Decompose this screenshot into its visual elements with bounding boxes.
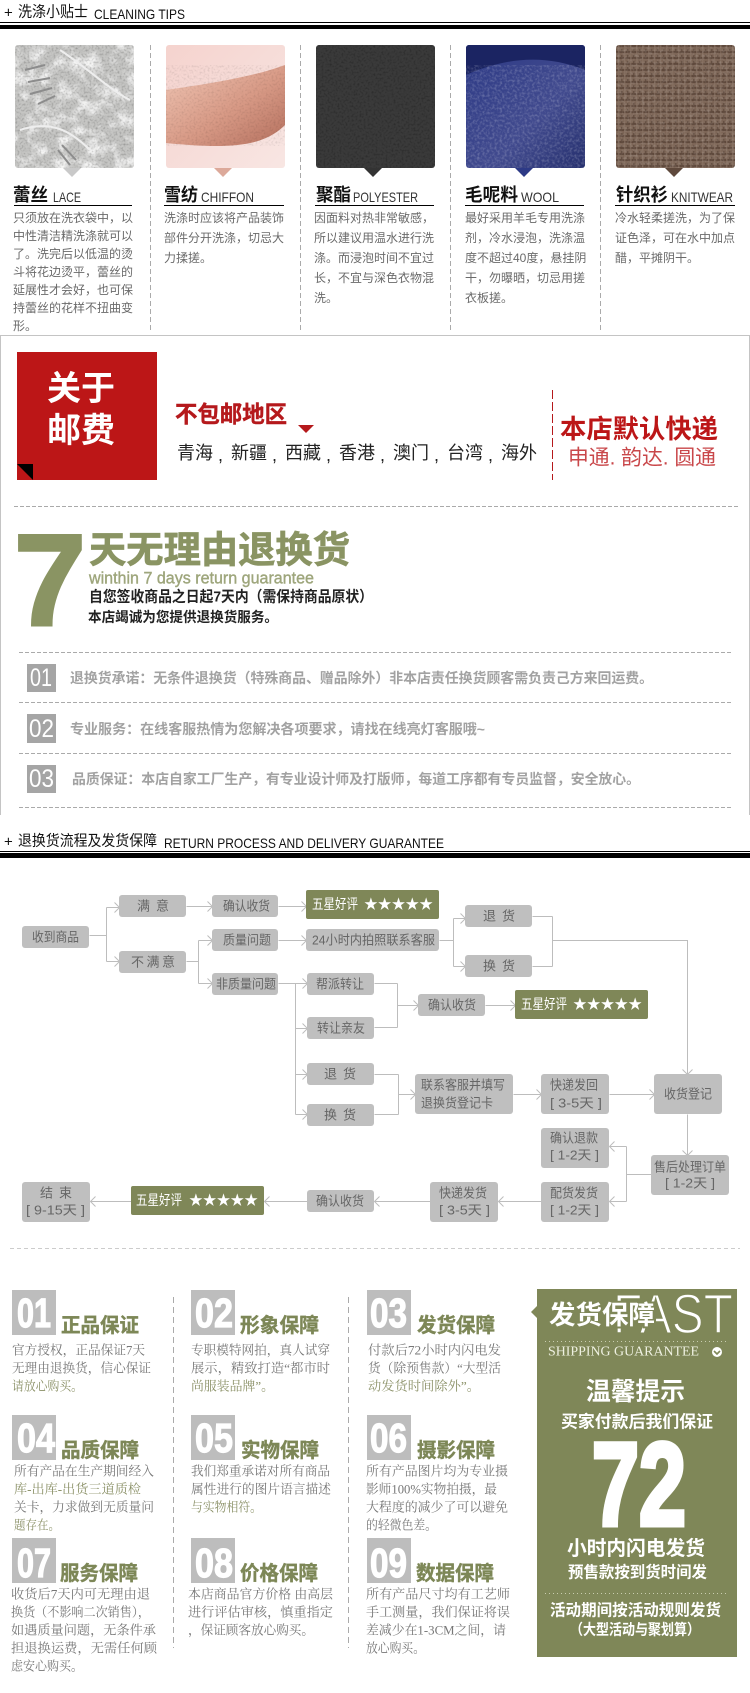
heading: 7 day return: 本店竭诚为您提供退换货服务。 [88, 609, 278, 625]
step: exchange 2 [307, 1104, 374, 1126]
guarantee 02: 专职模特网拍，真人试穿 [191, 1342, 330, 1358]
guarantee 04: 所有产品在生产期间经入 [14, 1464, 154, 1478]
row 01: return promise: 退换货承诺：无条件退换货（特殊商品、赠品除外）非本店责任换货顾客需负责己方来回运费。 [70, 670, 653, 686]
icon: down chevron [712, 1347, 722, 1357]
guarantee 05: 与实物相符。 [191, 1500, 262, 1514]
guarantee 07 [11, 1538, 158, 1674]
badge: about shipping: 关于 [47, 370, 115, 408]
text: polyester care: 因面料对热非常敏感， [314, 210, 434, 225]
step: confirm refund: 确认退款 [550, 1130, 598, 1146]
step: five star review 2: ★★★★★ [573, 996, 642, 1012]
step: confirm receipt 2: 确认收货 [428, 998, 476, 1012]
step: pick and ship [541, 1182, 609, 1222]
heading: shipping guarantee: 发货保障 [549, 1300, 655, 1330]
guarantee 02: 展示，精致打造“都市时 [191, 1360, 330, 1376]
guarantee 01: 正品保证 [61, 1314, 139, 1337]
step: five star review 2 [515, 990, 648, 1019]
step: contact service and fill card [415, 1074, 513, 1114]
step: exchange: 换 货 [483, 958, 515, 974]
step: confirm receipt 2 [418, 994, 485, 1016]
text: lace care: 只须放在洗衣袋中，以 [13, 210, 133, 225]
guarantee 03: 03 [370, 1290, 407, 1336]
guarantee 03: 动发货时间除外”。 [368, 1378, 480, 1394]
icon: red down triangle [298, 425, 314, 433]
guarantee 07: 虑安心购买。 [11, 1658, 83, 1674]
icon: left notch [531, 1306, 537, 1318]
heading: wool: 毛呢料 [465, 185, 518, 205]
text: lace care: 中性清洁精洗涤就可以 [13, 228, 133, 243]
heading: lace [13, 185, 81, 205]
guarantee 03: 货（除预售款）“大型活 [368, 1360, 501, 1376]
section header: return process [0, 832, 750, 858]
guarantee 08: ，保证顾客放心购买。 [188, 1622, 314, 1638]
step: ship back: [ 3-5天 ] [550, 1096, 602, 1110]
heading: regions without free shipping: 不包邮地区 [175, 401, 287, 427]
badge: about shipping [17, 352, 157, 480]
section header: cleaning tips: + [4, 4, 13, 22]
panel: wool [465, 45, 586, 305]
text: lace care [13, 210, 133, 333]
guarantee 04: 库-出库-出货三道质检 [14, 1482, 141, 1496]
text: excluded regions: 澳门 [393, 443, 429, 463]
step: five star review 3: ★★★★★ [189, 1192, 258, 1208]
step: goods registered [654, 1074, 722, 1114]
step: end: [ 9-15天 ] [26, 1202, 85, 1218]
step: quality issue [212, 929, 278, 951]
watermark: FAST: FAST [613, 1282, 733, 1345]
panel: chiffon [164, 45, 285, 265]
step: received goods: 收到商品 [32, 930, 79, 944]
text: excluded regions: , [380, 445, 385, 465]
step: ship back [541, 1074, 609, 1114]
step: contact service and fill card: 联系客服并填写 [421, 1078, 505, 1092]
callout text: 温馨提示 [586, 1378, 685, 1406]
step: five star review 2: 五星好评 [521, 996, 567, 1012]
step: quality issue: 质量问题 [223, 932, 271, 948]
row 01: return promise [27, 664, 653, 692]
row 03: quality [27, 765, 640, 793]
step: satisfied: 满 意 [137, 898, 169, 914]
step: return 2 [307, 1063, 374, 1085]
panel: shipping and returns frame [0, 336, 750, 815]
text: lace care: 延展性才会好，也可保 [13, 283, 133, 297]
step: ship back: 快递发回 [550, 1078, 598, 1092]
text: lace care: 了。洗完后以低温的烫 [13, 246, 133, 261]
guarantee 01 [12, 1290, 151, 1394]
guarantee 07: 服务保障 [60, 1562, 138, 1585]
heading: chiffon: 雪纺 [164, 184, 198, 205]
section header: cleaning tips: CLEANING TIPS [94, 6, 185, 22]
section header: cleaning tips: 洗涤小贴士 [18, 4, 88, 20]
text: lace care: 形。 [13, 319, 37, 333]
text: chiffon care: 洗涤时应该将产品装饰 [164, 210, 284, 225]
text: wool care: 干，勿曝晒，切忌用搓 [465, 270, 585, 285]
text: chiffon care [164, 210, 284, 265]
section header: return process: + [4, 834, 13, 850]
row 01: return promise: 01 [30, 664, 52, 692]
panel: shipping guarantee: 小时内闪电发货 [567, 1536, 705, 1560]
step: exchange [465, 955, 532, 977]
swatch: lace fabric [15, 45, 134, 168]
step: pick and ship: [ 1-2天 ] [550, 1202, 599, 1218]
guarantee 04: 关卡，力求做到无质量问 [14, 1500, 154, 1516]
guarantee 09: 放心购买。 [366, 1640, 425, 1656]
heading: knitwear [616, 185, 733, 205]
guarantee 08: 价格保障 [240, 1562, 318, 1585]
text: wool care: 衣板搓。 [465, 290, 513, 305]
heading: knitwear: 针织衫 [616, 185, 668, 205]
text: excluded regions: 台湾 [447, 443, 483, 463]
step: end: 结 束 [40, 1186, 72, 1200]
guarantee 05 [191, 1415, 331, 1514]
step: transfer to friends [307, 1017, 374, 1039]
guarantee 07: 收货后7天内可无理由退 [11, 1586, 150, 1602]
step: confirm receipt: 确认收货 [223, 898, 270, 914]
pointer [214, 168, 232, 177]
panel: shipping guarantee: （大型活动与聚划算） [570, 1620, 700, 1638]
guarantee 06: 大程度的减少了可以避免 [366, 1500, 508, 1514]
step: confirm refund: [ 1-2天 ] [550, 1148, 599, 1162]
step: five star review 3: 五星好评 [136, 1192, 182, 1208]
guarantee 03: 付款后72小时内闪电发 [368, 1342, 501, 1358]
heading: 7 day return [14, 507, 373, 653]
text: polyester care: 洗。 [314, 291, 338, 305]
step: after-sale processing [651, 1155, 729, 1195]
guarantee 01: 无理由退换货，信心保证 [12, 1360, 151, 1376]
guarantee 02: 尚服装品牌”。 [191, 1378, 274, 1394]
text: knitwear care: 证色泽，可在水中加点 [615, 230, 735, 245]
guarantee 08 [188, 1538, 333, 1638]
heading: chiffon: CHIFFON [201, 189, 254, 205]
heading: polyester: 聚酯 [316, 185, 351, 205]
step: confirm receipt 3 [307, 1190, 374, 1212]
heading: 7 day return: 天无理由退换货 [89, 530, 350, 570]
text: default couriers [560, 414, 718, 470]
swatch: wool fabric [466, 45, 585, 168]
guarantee 02 [191, 1290, 330, 1394]
guarantee 02: 形象保障 [240, 1313, 319, 1337]
step: transfer to friends: 转让亲友 [317, 1020, 365, 1036]
step: confirm refund [541, 1128, 609, 1168]
guarantee 09: 差减少在1-3CM之间，请 [366, 1622, 506, 1638]
step: five star review: ★★★★★ [364, 896, 433, 912]
guarantee 04: 品质保障 [61, 1439, 139, 1462]
red dashed divider [552, 390, 554, 480]
step: transfer via group [307, 973, 374, 995]
dashed column dividers [150, 45, 600, 331]
step: return 2: 退 货 [324, 1066, 356, 1082]
text: default couriers: 本店默认快递 [560, 414, 718, 444]
text: excluded regions: , [326, 445, 331, 465]
guarantee 05: 我们郑重承诺对所有商品 [191, 1464, 330, 1478]
step: five star review: 五星好评 [312, 896, 358, 912]
step: courier ship [430, 1182, 498, 1222]
step: transfer via group: 帮派转让 [316, 976, 364, 992]
guarantee 03: 发货保障 [417, 1313, 495, 1337]
step: contact service and fill card: 退换货登记卡 [421, 1096, 493, 1110]
text: default couriers: 申通. 韵达. 圆通 [568, 446, 716, 470]
text: excluded regions: , [488, 445, 493, 465]
guarantee 06: 的轻微色差。 [366, 1518, 437, 1532]
connector arrows [90, 902, 692, 1206]
step: after-sale processing: 售后处理订单 [654, 1160, 726, 1174]
step: satisfied [119, 895, 186, 917]
section header: cleaning tips [0, 4, 750, 29]
heading: lace: 蕾丝 [13, 185, 48, 205]
panel: knitwear [615, 45, 735, 265]
panel: shipping guarantee: 预售款按到货时间发 [568, 1562, 707, 1582]
step: five star review [306, 890, 439, 919]
pointer [364, 168, 382, 177]
guarantee 07: 如遇质量问题，无条件承 [11, 1622, 156, 1638]
text: excluded regions: , [218, 445, 223, 465]
text: excluded regions: 香港 [339, 443, 375, 463]
heading: chiffon [164, 184, 254, 205]
row 02: service: 02 [29, 715, 54, 743]
guarantee 03 [367, 1290, 501, 1394]
guarantee 04: 04 [17, 1415, 55, 1461]
guarantee 08: 进行评估审核，慎重指定 [188, 1604, 333, 1620]
guarantee 01: 01 [17, 1290, 51, 1336]
step: non quality issue [212, 973, 278, 995]
panel: lace [13, 45, 134, 333]
guarantee 06: 06 [370, 1415, 407, 1461]
text: knitwear care: 醋，平摊阴干。 [615, 250, 699, 265]
pointer [665, 168, 683, 177]
row 02: service [27, 714, 485, 743]
guarantee 02: 02 [195, 1290, 233, 1336]
step: non quality issue: 非质量问题 [216, 976, 276, 992]
panel: shipping guarantee [531, 1282, 737, 1657]
heading: 7 day return: 7 [14, 507, 86, 653]
text: excluded regions: , [272, 445, 277, 465]
heading: lace: LACE [53, 189, 81, 205]
guarantee 09: 所有产品尺寸均有工艺师 [366, 1586, 510, 1602]
panel: shipping guarantee: 活动期间按活动规则发货 [550, 1600, 721, 1620]
guarantee 06 [366, 1415, 508, 1532]
step: return: 退 货 [483, 908, 515, 924]
panel: shipping guarantee: 买家付款后我们保证 [561, 1412, 713, 1432]
row 03: quality: 03 [29, 765, 54, 793]
text: lace care: 持蕾丝的花样不扭曲变 [13, 300, 133, 315]
guarantee 01: 请放心购买。 [12, 1378, 83, 1394]
text: excluded regions: 青海 [177, 443, 213, 463]
guarantee 05: 属性进行的图片语言描述 [191, 1482, 331, 1496]
text: polyester care [314, 210, 434, 305]
step: confirm receipt 3: 确认收货 [316, 1194, 364, 1208]
section header: return process: 退换货流程及发货保障 [18, 832, 157, 850]
swatch: knit fabric [616, 45, 735, 168]
guarantee 09: 手工测量，我们保证将误 [366, 1604, 510, 1620]
text: wool care: 度不超过40度，悬挂阴 [465, 250, 586, 265]
swatch: chiffon fabric [166, 45, 285, 168]
step: confirm receipt [212, 895, 278, 917]
guarantee 04 [12, 1415, 154, 1532]
guarantee 07: 担退换运费，无需任何顾 [11, 1640, 158, 1656]
guarantee 08: 本店商品官方价格 由高层 [188, 1586, 333, 1602]
text: polyester care: 涤。而浸泡时间不宜过 [314, 250, 434, 265]
step: received goods [22, 926, 89, 948]
text: chiffon care: 部件分开洗涤，切忌大 [164, 230, 284, 245]
panel: polyester [314, 45, 435, 305]
step: five star review 3 [131, 1186, 264, 1215]
guarantee 09 [366, 1538, 510, 1656]
text: polyester care: 长，不宜与深色衣物混 [314, 270, 434, 285]
text: excluded regions: , [434, 445, 439, 465]
big number 72: 72 [592, 1419, 686, 1551]
step: exchange 2: 换 货 [324, 1108, 356, 1122]
guarantee 05: 实物保障 [241, 1438, 319, 1462]
step: goods registered: 收货登记 [664, 1086, 712, 1102]
guarantee 07: 07 [17, 1540, 51, 1586]
text: excluded regions: 西藏 [285, 443, 321, 463]
text: lace care: 斗将花边烫平，蕾丝的 [13, 264, 133, 279]
step: after-sale processing: [ 1-2天 ] [665, 1176, 715, 1190]
text: excluded regions [177, 443, 537, 465]
text: wool care: 剂，冷水浸泡，洗涤温 [465, 230, 585, 245]
step: contact within 24h [306, 929, 439, 951]
row 02: service: 专业服务：在线客服热情为您解决各项要求，请找在线亮灯客服哦~ [70, 721, 485, 737]
heading: wool [465, 185, 559, 205]
flowchart [22, 890, 729, 1222]
text: wool care: 最好采用羊毛专用洗涤 [465, 210, 585, 225]
badge: about shipping: 邮费 [47, 412, 115, 450]
step: not satisfied: 不 满 意 [131, 954, 175, 970]
guarantee 09: 数据保障 [416, 1562, 494, 1585]
pointer [515, 168, 533, 177]
text: excluded regions: 海外 [501, 443, 537, 463]
step: end [22, 1182, 90, 1222]
step: contact within 24h: 24小时内拍照联系客服 [312, 932, 435, 948]
guarantee 04: 题存在。 [14, 1518, 60, 1532]
pointer [63, 168, 81, 177]
step: courier ship: 快递发货 [439, 1186, 487, 1200]
heading: polyester [316, 185, 418, 205]
text: polyester care: 所以建议用温水进行洗 [314, 231, 434, 245]
guarantee 06: 所有产品图片均为专业摄 [366, 1464, 508, 1478]
heading: 7 day return: winthin 7 days return guarantee [88, 568, 314, 588]
heading: 7 day return: 自您签收商品之日起7天内（需保持商品原状） [89, 588, 373, 606]
text: excluded regions: 新疆 [231, 443, 267, 463]
guarantee 06: 影师100%实物拍摄，最 [366, 1482, 497, 1498]
section header: return process: RETURN PROCESS AND DELIVERY GUARANTEE [164, 835, 444, 851]
guarantee 09: 09 [370, 1540, 407, 1586]
swatch: polyester fabric [316, 45, 435, 168]
step: courier ship: [ 3-5天 ] [439, 1202, 490, 1218]
subheading: english: SHIPPING GUARANTEE [548, 1344, 699, 1360]
text: knitwear care: 冷水轻柔搓洗，为了保 [615, 210, 735, 225]
row 03: quality: 品质保证：本店自家工厂生产，有专业设计师及打版师，每道工序都有专员监督，安全放心。 [72, 771, 640, 787]
text: knitwear care [615, 210, 735, 265]
text: chiffon care: 力揉搓。 [164, 250, 212, 265]
step: pick and ship: 配货发货 [550, 1186, 598, 1200]
guarantee 08: 08 [195, 1540, 233, 1586]
guarantee 06: 摄影保障 [417, 1439, 495, 1462]
heading: polyester: POLYESTER [353, 189, 418, 205]
guarantee 01: 官方授权，正品保证7天 [12, 1342, 145, 1358]
heading: knitwear: KNITWEAR [671, 189, 733, 205]
heading: wool: WOOL [521, 189, 559, 205]
step: return [465, 905, 532, 927]
guarantee 05: 05 [195, 1415, 233, 1461]
step: not satisfied [119, 951, 186, 973]
text: wool care [465, 210, 586, 305]
guarantee 07: 换货（不影响二次销售）， [11, 1604, 150, 1620]
